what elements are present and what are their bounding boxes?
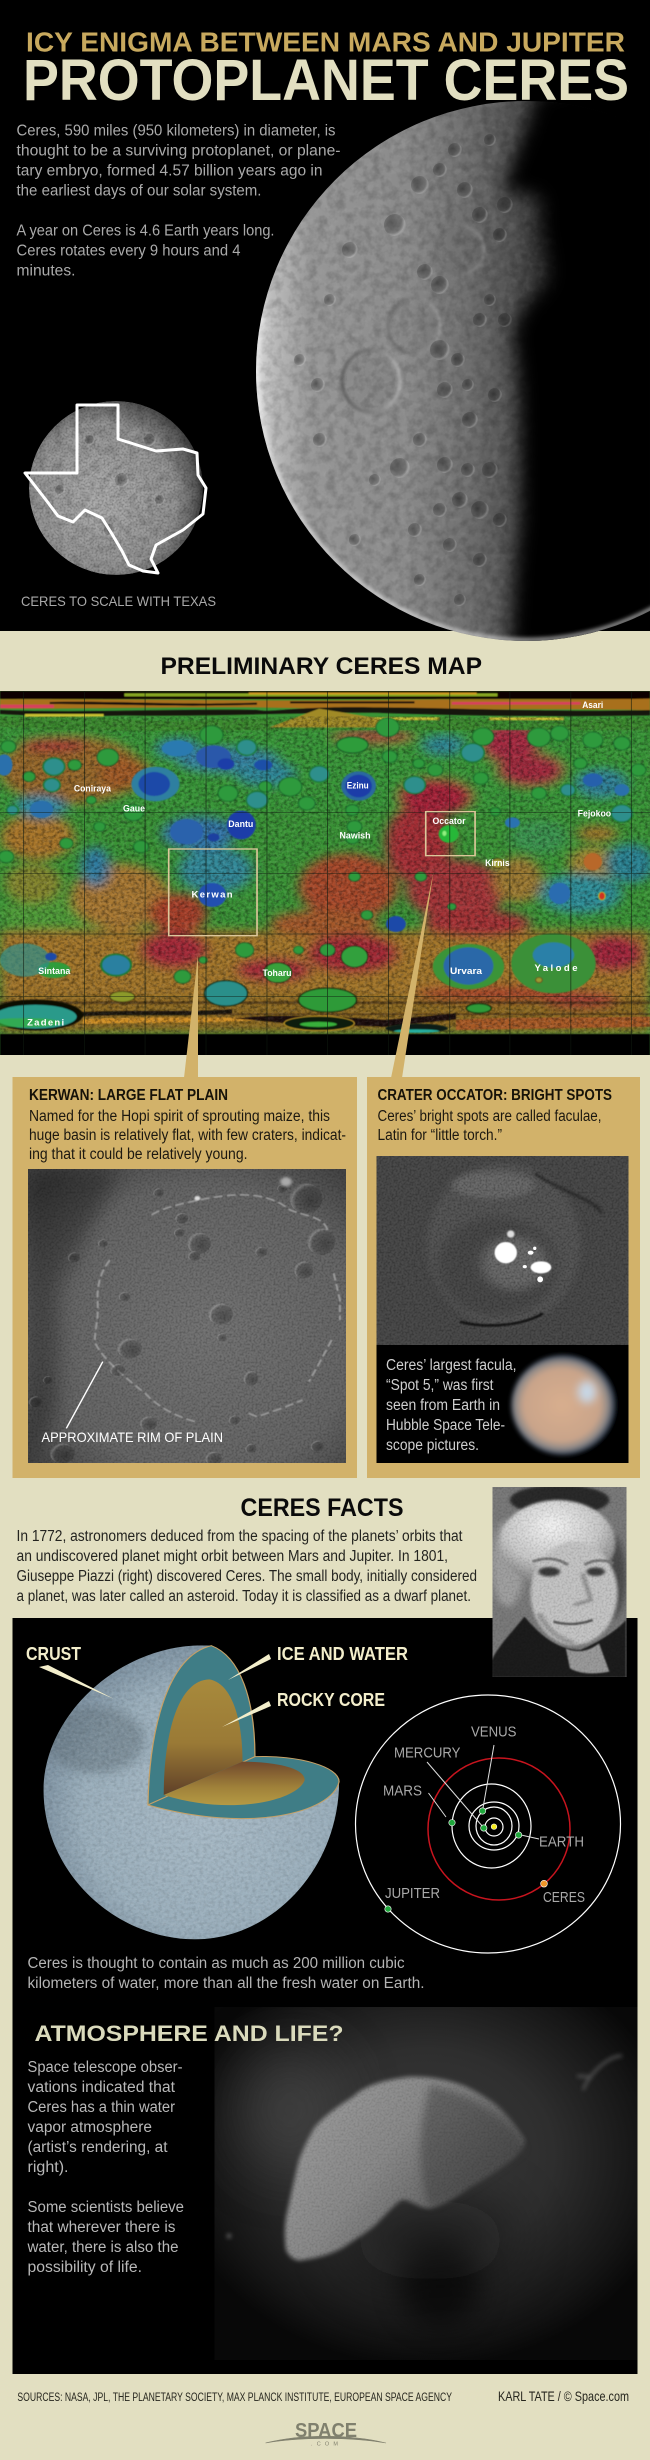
text block: atmosphere: Ceres has a thin water <box>28 2099 175 2116</box>
diagram: cutaway of Ceres <box>37 1640 344 1943</box>
leader lines <box>427 1745 539 1839</box>
label: rocky core: ROCKY CORE <box>277 1690 385 1710</box>
arrow: core pointer <box>222 1701 271 1727</box>
text block: Spot 5: seen from Earth in <box>386 1397 500 1414</box>
map labels: Yalode <box>534 963 578 974</box>
caption: to scale: CERES TO SCALE WITH TEXAS <box>21 593 216 609</box>
text block: Kerwan description: huge basin is relatively flat, with few craters, indicat- <box>29 1127 346 1144</box>
text block: intro <box>16 122 340 280</box>
planet labels: MERCURY <box>394 1745 460 1762</box>
text block: Ceres facts <box>16 1528 477 1605</box>
panel: black facts and atmosphere <box>12 1618 638 2374</box>
rocky core <box>164 1679 243 1795</box>
text block: Ceres facts: In 1772, astronomers deduced from the spacing of the planets’ orbits that <box>16 1528 463 1545</box>
text block: Spot 5: Ceres’ largest facula, <box>386 1357 516 1374</box>
chart: orbit diagram <box>356 1695 620 1953</box>
panel: Kerwan <box>12 1077 357 1478</box>
text block: atmosphere: vapor atmosphere <box>28 2119 152 2136</box>
noise texture <box>0 717 650 1033</box>
map labels: Gaue <box>123 804 145 815</box>
logo: Space.com: .COM <box>311 2442 338 2448</box>
heading: Kerwan: KERWAN: LARGE FLAT PLAIN <box>29 1087 228 1104</box>
heading: Occator: CRATER OCCATOR: BRIGHT SPOTS <box>378 1087 612 1104</box>
craters <box>0 718 646 1033</box>
text block: water volume <box>28 1955 424 1992</box>
text block: atmosphere: possibility of life. <box>28 2259 142 2276</box>
text block: Spot 5 <box>386 1357 516 1454</box>
caption: rim of plain: APPROXIMATE RIM OF PLAIN <box>42 1429 223 1445</box>
text block: Kerwan description: ing that it could be relatively young. <box>29 1146 248 1163</box>
map labels <box>27 700 611 1028</box>
text block: atmosphere <box>27 2059 184 2276</box>
text block: atmosphere: (artist’s rendering, at <box>28 2139 168 2156</box>
map labels: Sintana <box>38 966 71 977</box>
text block: intro: the earliest days of our solar system. <box>16 182 262 200</box>
outer crust <box>37 1640 344 1943</box>
text block: atmosphere: Some scientists believe <box>28 2199 184 2216</box>
text block: Kerwan description: Named for the Hopi spirit of sprouting maize, this <box>29 1108 330 1125</box>
text block: Spot 5: Hubble Space Tele- <box>386 1417 505 1434</box>
heading: atmosphere: ATMOSPHERE AND LIFE? <box>34 2021 344 2046</box>
text block: atmosphere: that wherever there is <box>28 2219 176 2236</box>
planet labels: JUPITER <box>385 1885 440 1902</box>
text block: atmosphere: water, there is also the <box>27 2239 178 2256</box>
text block: Kerwan description <box>29 1108 346 1163</box>
text block: atmosphere: vations indicated that <box>28 2079 176 2096</box>
image: Kerwan basin <box>28 1169 346 1465</box>
label: crust: CRUST <box>26 1644 81 1664</box>
heading: Ceres facts: CERES FACTS <box>240 1494 404 1522</box>
title <box>23 26 629 113</box>
planet labels <box>383 1724 585 1906</box>
text block: Ceres facts: a planet, was later called an asteroid. Today it is classified as a dwarf planet. <box>16 1588 471 1605</box>
text block: intro: tary embryo, formed 4.57 billion years ago in <box>16 162 322 180</box>
planet dots <box>385 1808 547 1912</box>
heading: map: PRELIMINARY CERES MAP <box>160 653 482 680</box>
planet labels: CERES <box>543 1889 585 1906</box>
text block: Occator description: Latin for “little torch.” <box>378 1127 502 1144</box>
arrow: crust pointer <box>39 1665 114 1699</box>
image: Occator crater <box>376 1156 628 1345</box>
arrow: Occator callout pointer <box>391 872 434 1078</box>
grid lines <box>0 691 650 1055</box>
text block: Occator description: Ceres’ bright spots are called faculae, <box>378 1108 602 1125</box>
orbits <box>356 1695 620 1953</box>
map labels: Ezinu <box>347 780 369 791</box>
arrow: Kerwan callout pointer <box>184 955 198 1078</box>
map labels: Urvara <box>450 966 483 977</box>
Texas outline <box>25 405 206 573</box>
text block: intro: Ceres rotates every 9 hours and 4 <box>16 242 241 260</box>
panel: black header <box>0 0 650 631</box>
arrow: ice pointer <box>228 1654 271 1680</box>
polar dark bands <box>0 691 650 1061</box>
logo: Space.com: SPACE <box>295 2420 357 2442</box>
map labels: Asari <box>582 700 603 711</box>
planet labels: MARS <box>383 1783 422 1800</box>
inset: Hubble view <box>376 1345 628 1463</box>
Ceres orbit <box>428 1758 570 1900</box>
image: Ceres to scale with Texas outline <box>23 401 208 575</box>
label: ice and water: ICE AND WATER <box>277 1644 408 1664</box>
ice and water layer <box>148 1646 255 1805</box>
plain rim <box>95 1195 340 1422</box>
text block: Ceres facts: an undiscovered planet might orbit between Mars and Jupiter. In 1801, <box>16 1548 448 1565</box>
text block: atmosphere: right). <box>28 2159 68 2176</box>
text block: intro: A year on Ceres is 4.6 Earth years long. <box>16 222 274 240</box>
map labels: Coniraya <box>74 784 112 795</box>
text block: intro: Ceres, 590 miles (950 kilometers) in diameter, is <box>16 122 336 140</box>
text block: water volume: Ceres is thought to contain as much as 200 million cubic <box>28 1955 405 1972</box>
planet labels: VENUS <box>471 1724 516 1741</box>
map labels: Kerwan <box>192 889 233 900</box>
map labels: Dantu <box>228 819 253 830</box>
image: Hubble Ceres <box>511 1354 619 1456</box>
text block: intro: minutes. <box>16 262 76 280</box>
bright faculae <box>495 1242 517 1263</box>
map labels: Toharu <box>262 968 292 979</box>
text block: water volume: kilometers of water, more than all the fresh water on Earth. <box>28 1975 424 1992</box>
footer: sources: SOURCES: NASA, JPL, THE PLANETARY SOCIETY, MAX PLANCK INSTITUTE, EUROPEAN SPACE AGENCY <box>17 2392 452 2404</box>
planet labels: EARTH <box>539 1834 584 1851</box>
text block: Spot 5: “Spot 5,” was first <box>386 1377 494 1394</box>
rim leader line <box>66 1362 103 1428</box>
logo: Space.com <box>266 2420 386 2448</box>
map labels: Occator <box>432 816 466 827</box>
locator boxes <box>169 849 257 936</box>
text block: atmosphere: Space telescope obser- <box>28 2059 182 2076</box>
text block: intro: thought to be a surviving protoplanet, or plane- <box>16 142 340 160</box>
text block: Ceres facts: Giuseppe Piazzi (right) discovered Ceres. The small body, initially considered <box>16 1568 477 1585</box>
text block: Spot 5: scope pictures. <box>386 1437 479 1454</box>
image: atmosphere rendering <box>214 2007 638 2360</box>
image: portrait of Giuseppe Piazzi <box>491 1485 626 1677</box>
panel: Occator <box>367 1077 640 1478</box>
text block: Occator description <box>378 1108 602 1144</box>
image: large Ceres crescent <box>256 92 650 650</box>
chart: colour topographic map <box>0 691 650 1061</box>
map labels: Nawish <box>340 831 371 842</box>
title line: kicker: ICY ENIGMA BETWEEN MARS AND JUPITER <box>26 26 625 58</box>
map labels: Kirnis <box>485 858 510 869</box>
small Ceres globe <box>29 401 203 575</box>
map labels: Fejokoo <box>578 809 611 820</box>
map labels: Zadeni <box>27 1017 64 1028</box>
